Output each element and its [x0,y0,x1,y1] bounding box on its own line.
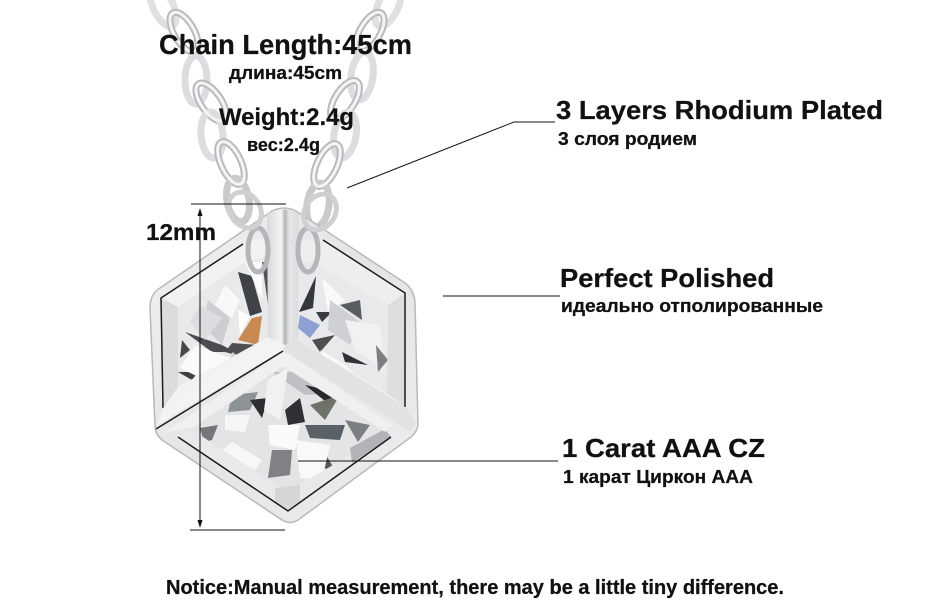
height dimension marker [190,204,286,530]
callout: perfect polished: Perfect Polished [560,263,774,293]
bail rings [222,186,343,272]
callout: rhodium plated: 3 Layers Rhodium Plated [556,95,883,125]
label: chain length russian: длина:45cm [229,63,342,83]
cube edge lines [156,240,405,511]
bottom face tray [178,430,391,511]
callout: rhodium plated [347,95,883,188]
bottom gem [200,369,370,479]
label: chain length: Chain Length:45cm [159,29,412,60]
left chain links [145,0,253,224]
left face band [161,236,268,408]
callout: rhodium plated: 3 слоя родием [558,129,697,149]
label: 12mm: 12mm [146,219,216,245]
right gem [298,276,388,372]
callout: cubic zirconia [298,433,765,487]
label: weight russian: вес:2.4g [247,135,320,155]
center vertical bar [267,210,299,345]
callout: cubic zirconia: 1 Carat AAA CZ [562,433,765,463]
notice: Notice:Manual measurement, there may be a little tiny difference. [166,577,784,599]
label: weight: Weight:2.4g [219,104,354,131]
callout: perfect polished [443,263,823,316]
pendant: cube frame [150,208,418,522]
outer hexagon body [150,208,418,522]
necklace chain [145,0,406,228]
right face band [298,240,405,407]
right chain links [304,0,406,228]
left gem [178,256,268,386]
lower center bars [157,337,285,425]
callout: perfect polished: идеально отполированные [561,296,823,316]
callout: cubic zirconia: 1 карат Циркон AAA [563,467,753,487]
